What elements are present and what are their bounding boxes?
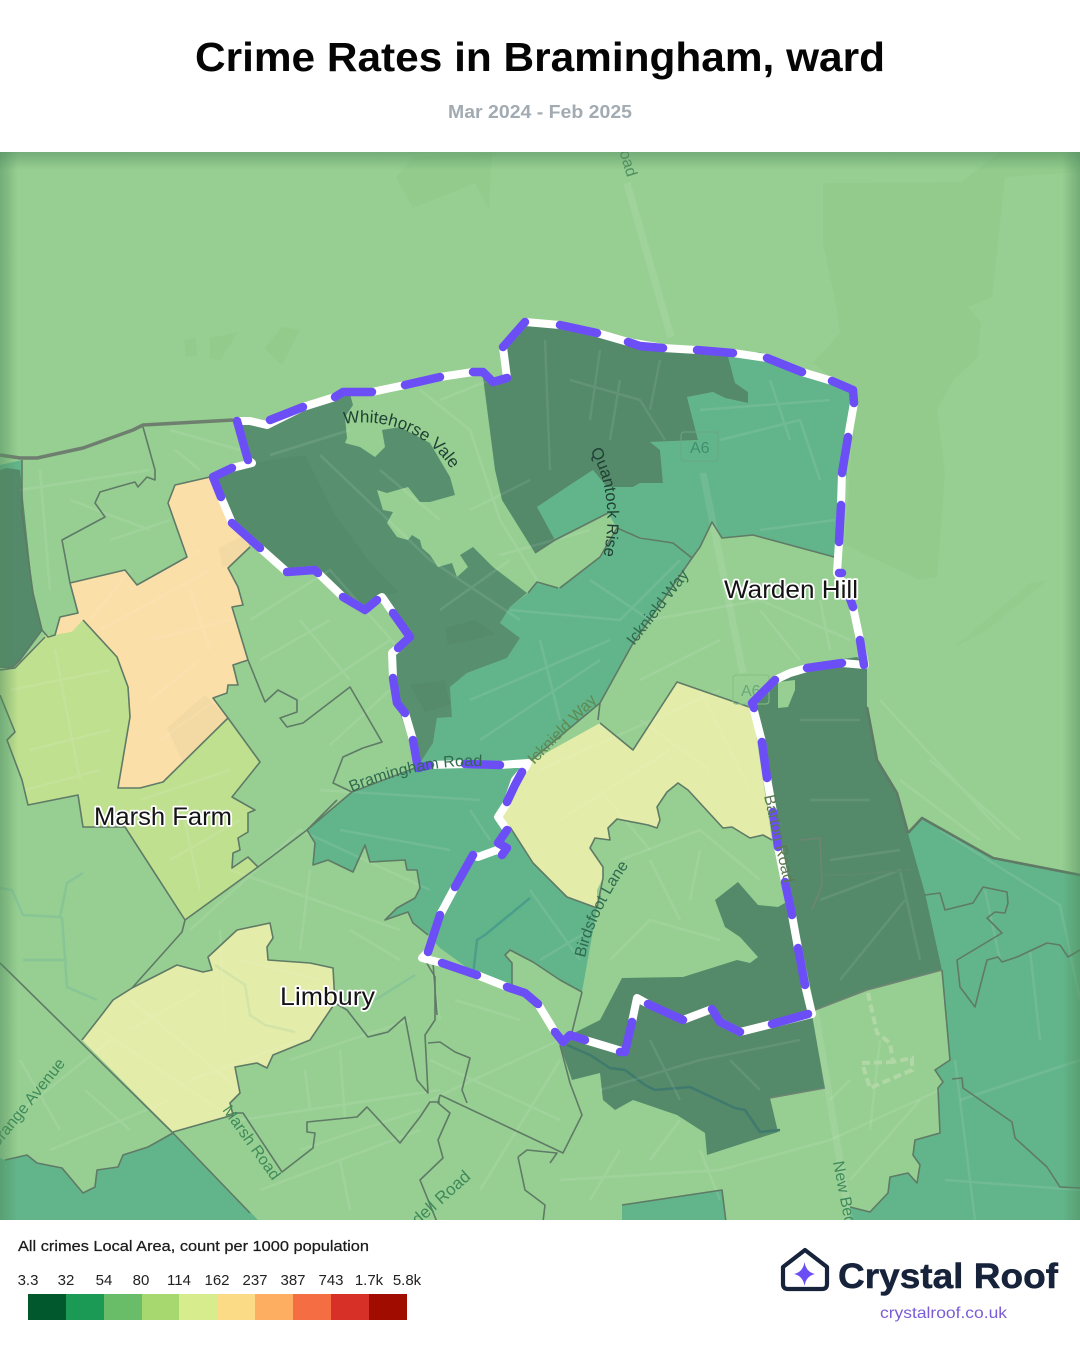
logo wordmark: Crystal Roof (838, 1257, 1058, 1296)
A6 shield labels: A6 (741, 683, 761, 700)
street network (10, 183, 1080, 1222)
label: New Bedford Road: New Bedford Road (833, 1161, 853, 1220)
label: Birdsfoot Lane: Birdsfoot Lane (574, 862, 628, 957)
legend scale labels: 743 (318, 1272, 344, 1289)
label: Icknield Way south: Icknield Way (527, 695, 596, 764)
region: south-west mid green (0, 1133, 260, 1222)
legend colour swatches (28, 1294, 407, 1320)
subtitle: date range: Mar 2024 - Feb 2025 (448, 101, 632, 122)
thick south-east boundary (908, 818, 1080, 875)
legend scale labels: 32 (58, 1272, 74, 1289)
Limbury stream (215, 965, 295, 1032)
label: Barton Road: Barton Road (764, 795, 795, 883)
legend scale labels: 387 (280, 1272, 306, 1289)
label: Marsh Farm: Marsh Farm (94, 803, 232, 831)
stream west (0, 873, 97, 1000)
label: Quantock Rise: Quantock Rise (591, 448, 620, 556)
thick northern boundary (0, 420, 233, 458)
ward and area boundary lines (0, 420, 1080, 1222)
region: peach high-crime area (55, 477, 250, 788)
label: Marsh Road: Marsh Road (222, 1104, 282, 1180)
A6 shield labels (690, 440, 761, 700)
legend (18, 1238, 422, 1320)
A6 road shields (681, 432, 769, 704)
title: Crime Rates in Bramingham, ward (195, 34, 885, 80)
label: Icknield Way north: Icknield Way (626, 570, 688, 645)
label: Limbury: Limbury (280, 983, 376, 1011)
map edge vignette (0, 152, 1080, 1220)
region: bottom mid green strip (622, 1191, 725, 1220)
logo: Crystal Roof (783, 1250, 1058, 1322)
region: west dark low-crime (242, 396, 527, 762)
stream in mid green (473, 898, 530, 975)
region: south dark low-crime (570, 882, 812, 1053)
region: yellow-green west and Marsh Farm (0, 620, 260, 920)
region: central pale yellow (498, 682, 772, 908)
west dark inner shade (410, 620, 495, 712)
choropleth map (0, 152, 1080, 1220)
region: Bramingham Road mid green (307, 763, 597, 992)
icon: house with star (783, 1250, 827, 1289)
ward boundary: white line with purple dashes (213, 322, 865, 1052)
place labels (94, 576, 858, 1011)
label: road at top: Road (620, 152, 638, 177)
peach darker blocks (245, 540, 250, 547)
label: Bramingham Road: Bramingham Road (348, 754, 482, 792)
label: Whitehorse Vale: Whitehorse Vale (342, 410, 457, 468)
legend scale labels: 162 (204, 1272, 230, 1289)
A6 main road (627, 183, 850, 1222)
legend scale labels (18, 1272, 422, 1289)
stream in south (567, 1045, 780, 1132)
legend scale labels: 237 (242, 1272, 268, 1289)
legend scale labels: 1.7k (355, 1272, 384, 1289)
region: east mid green (850, 818, 1080, 1222)
region: north-centre mid green (537, 352, 855, 558)
legend scale labels: 54 (96, 1272, 112, 1289)
region: central mid green (418, 528, 692, 768)
footpath loop (862, 993, 912, 1088)
road labels (0, 152, 853, 1220)
label: Road clipped at bottom: dell Road (414, 1170, 471, 1220)
region: far-west dark area (0, 460, 22, 482)
region: Limbury pale yellow (82, 923, 335, 1132)
region: north dark low-crime (483, 322, 748, 553)
land patches north (184, 152, 1080, 648)
legend scale labels: 3.3 (18, 1272, 38, 1289)
A6 shield labels: A6 (690, 440, 710, 457)
region: east dark low-crime (752, 657, 942, 1010)
legend title: All crimes Local Area, count per 1000 population (18, 1238, 369, 1255)
legend scale labels: 114 (167, 1272, 191, 1289)
legend scale labels: 5.8k (393, 1272, 422, 1289)
west dark deeper block (213, 455, 398, 610)
legend scale labels: 80 (133, 1272, 149, 1289)
website link: crystalroof.co.uk (880, 1305, 1008, 1322)
label: Warden Hill: Warden Hill (724, 576, 858, 604)
